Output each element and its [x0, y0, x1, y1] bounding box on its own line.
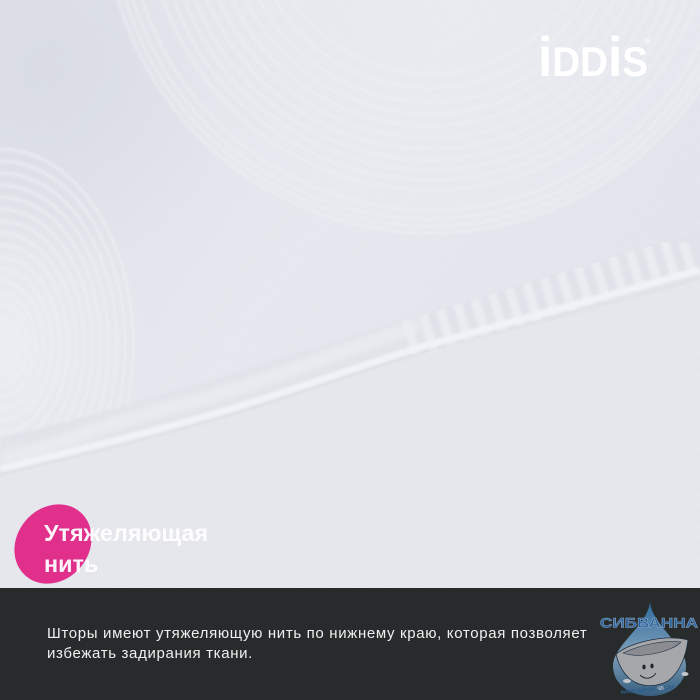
icon: water drop	[613, 602, 686, 696]
weight thread stripes, right	[390, 252, 700, 345]
soft fold highlight, left	[0, 325, 420, 458]
hem edge	[0, 278, 700, 475]
weighted hem seam	[0, 231, 700, 475]
heading: weighted thread: нить	[44, 551, 98, 577]
caption text: Шторы имеют утяжеляющую нить по нижнему краю, которая позволяет	[47, 625, 587, 642]
logo url: www.sibvanna.ru	[619, 683, 674, 696]
lower fabric panel	[0, 272, 700, 590]
concentric rings: left pattern	[0, 149, 133, 541]
icon: bathtub	[616, 638, 688, 690]
logo wordmark: СИБВАННА	[600, 614, 698, 630]
caption text: избежать задирания ткани.	[47, 645, 253, 662]
heading: weighted thread: Утяжеляющая	[44, 520, 208, 546]
fabric photo background	[0, 0, 699, 472]
caption text	[47, 625, 587, 662]
logo: iDDIS: ®	[645, 37, 651, 46]
hem band	[0, 231, 700, 475]
logo: iDDIS: iDDiS	[538, 25, 648, 88]
heading: weighted thread	[44, 520, 208, 577]
dark caption band	[0, 588, 700, 700]
hem stitching	[0, 270, 700, 469]
concentric rings: upper pattern	[105, 0, 700, 233]
pink circle badge	[0, 489, 108, 599]
